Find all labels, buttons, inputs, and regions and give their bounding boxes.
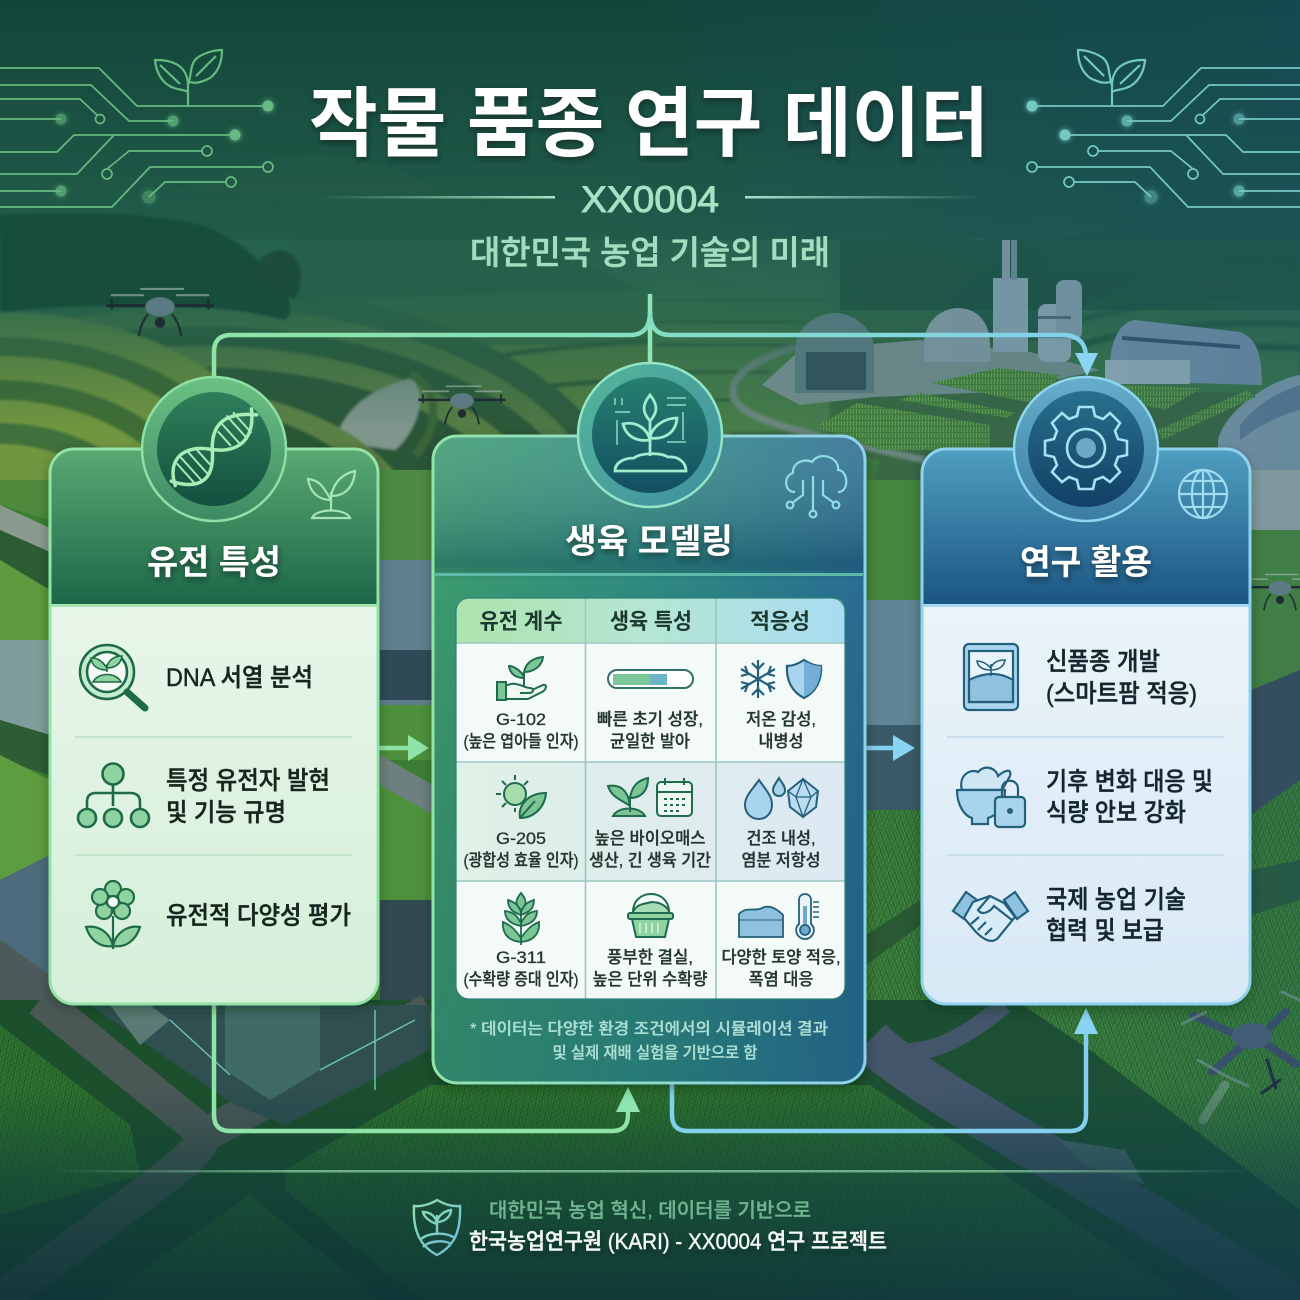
subtitle code with rules: XX0004 [581, 179, 719, 220]
icon: basket [628, 894, 673, 937]
icon: food bowl with lock [957, 768, 1025, 827]
connector: top branches [214, 294, 1086, 385]
cell: soil adaptation [722, 948, 840, 989]
cell: G-311 [464, 948, 578, 989]
subtitle: 대한민국 농업 기술의 미래 [470, 234, 830, 271]
cell: G-311: G-311 [496, 948, 546, 967]
background: left rice terraces [0, 262, 1300, 755]
icon: handshake [953, 892, 1028, 941]
text: new variety [1046, 648, 1197, 708]
drone: top left [108, 289, 212, 335]
background: centre fields [650, 240, 985, 520]
icon: sprout and calendar [608, 778, 692, 816]
cell: early growth [597, 710, 703, 751]
table header row: 유전 계수 [480, 609, 562, 634]
panel: genetic traits [50, 377, 378, 1004]
badge: DNA [142, 377, 286, 521]
cell: early growth: 균일한 발아 [610, 732, 690, 751]
icon: seedling [308, 471, 355, 518]
footnote [470, 1020, 828, 1062]
cell: abundant yield: 높은 단위 수확량 [592, 970, 708, 989]
text: new variety: (스마트팜 적응) [1046, 680, 1197, 708]
footer logo: shield [414, 1200, 460, 1255]
connector: bottom left [214, 1000, 628, 1131]
table header row [480, 609, 810, 634]
cell: cold tolerance: 저온 감성, [746, 710, 816, 729]
cell: soil adaptation: 폭염 대응 [748, 970, 814, 989]
icon: progress bar [608, 670, 693, 688]
text: international cooperation: 국제 농업 기술 [1046, 886, 1186, 914]
cell: G-205: (광합성 효율 인자) [464, 851, 578, 870]
heading: genetic traits: 유전 특성 [147, 544, 281, 582]
cell: soil adaptation: 다양한 토양 적응, [722, 948, 840, 967]
background: dark hill [0, 154, 640, 320]
cell: biomass [589, 829, 711, 870]
icon: soil and thermometer [739, 894, 819, 939]
icon: cloud network [786, 456, 846, 517]
text: gene expression: 및 기능 규명 [166, 799, 286, 827]
circuit decoration: left [0, 50, 274, 207]
footnote: 및 실제 재배 실험을 기반으로 함 [552, 1044, 758, 1062]
cell: G-102: (높은 엽아들 인자) [464, 732, 578, 751]
heading: research use: 연구 활용 [1020, 544, 1152, 582]
footer project name: 한국농업연구원 (KARI) - XX0004 연구 프로젝트 [469, 1229, 887, 1254]
icon: hand with sprout [497, 657, 546, 700]
badge: gear [1014, 377, 1158, 521]
background: footer shade [0, 1090, 1300, 1300]
text: gene expression: 특정 유전자 발현 [166, 767, 330, 795]
panel: growth modelling [433, 363, 865, 1083]
drone: lower right [1182, 992, 1300, 1120]
arrow: modelling to research use [864, 735, 915, 761]
text: DNA sequencing: DNA 서열 분석 [166, 664, 313, 692]
cell: G-205: G-205 [496, 829, 546, 848]
text: international cooperation [1046, 886, 1186, 945]
cell: G-102: G-102 [496, 710, 546, 729]
footnote: * 데이터는 다양한 환경 조건에서의 시뮬레이션 결과 [470, 1020, 828, 1038]
cell: cold tolerance: 내병성 [758, 732, 804, 751]
text: genetic diversity: 유전적 다양성 평가 [166, 902, 351, 930]
title: 작물 품종 연구 데이터 [309, 82, 989, 167]
icon: wheat [503, 893, 539, 945]
text: international cooperation: 협력 및 보급 [1046, 917, 1164, 945]
connector: bottom right [672, 1030, 1086, 1131]
cell: cold tolerance [746, 710, 816, 751]
cell: abundant yield: 풍부한 결실, [607, 948, 693, 967]
circuit decoration: right [1026, 50, 1300, 207]
drone: right edge [1240, 574, 1300, 610]
cell: drought tolerance: 염분 저항성 [742, 851, 820, 870]
cell: abundant yield [592, 948, 708, 989]
text: climate response: 기후 변화 대응 및 [1046, 768, 1213, 796]
icon: flower [86, 881, 140, 949]
icon: tablet [964, 644, 1018, 710]
arrow head: to research use [1075, 353, 1098, 376]
cell: biomass: 높은 바이오매스 [594, 829, 706, 848]
cell: drought tolerance: 건조 내성, [746, 829, 816, 848]
text: gene expression [166, 767, 330, 827]
background: bottom rice fields and roads [0, 992, 1300, 1300]
cell: early growth: 빠른 초기 성장, [597, 710, 703, 729]
icon: gene tree [78, 764, 149, 827]
text: new variety: 신품종 개발 [1046, 648, 1160, 676]
background: lower ground [0, 470, 1300, 1180]
drone: centre [420, 386, 504, 424]
icon: globe [1179, 470, 1227, 518]
text: climate response: 식량 안보 강화 [1046, 799, 1186, 827]
text: climate response [1046, 768, 1213, 827]
cell: G-205 [464, 829, 578, 870]
panel: research use [922, 377, 1250, 1004]
icon: magnifier [80, 645, 145, 708]
background: upper haze [0, 240, 1300, 430]
badge: modelling seedling [578, 363, 722, 507]
icon: sun and leaf [496, 775, 546, 818]
footer tagline: 대한민국 농업 혁신, 데이터를 기반으로 [489, 1199, 811, 1222]
arrow: genetics to modelling [378, 735, 429, 761]
arrow head: up to research use [1074, 1008, 1098, 1034]
table header row: 생육 특성 [610, 609, 692, 634]
heading: growth modelling: 생육 모델링 [565, 523, 733, 561]
cell: G-102 [464, 710, 578, 751]
cell: drought tolerance [742, 829, 820, 870]
icon: snowflake and shield [741, 660, 821, 698]
icon: water drops and crystal [745, 778, 818, 819]
table header row: 적응성 [750, 609, 810, 634]
cell: biomass: 생산, 긴 생육 기간 [589, 851, 711, 870]
arrow head: up to modelling [616, 1087, 640, 1112]
background: research facility [762, 240, 1300, 480]
table: growth data [456, 598, 845, 999]
footer rule [50, 1170, 1250, 1172]
cell: G-311: (수확량 증대 인자) [464, 970, 578, 989]
background: right terraces and hills [940, 240, 1300, 392]
